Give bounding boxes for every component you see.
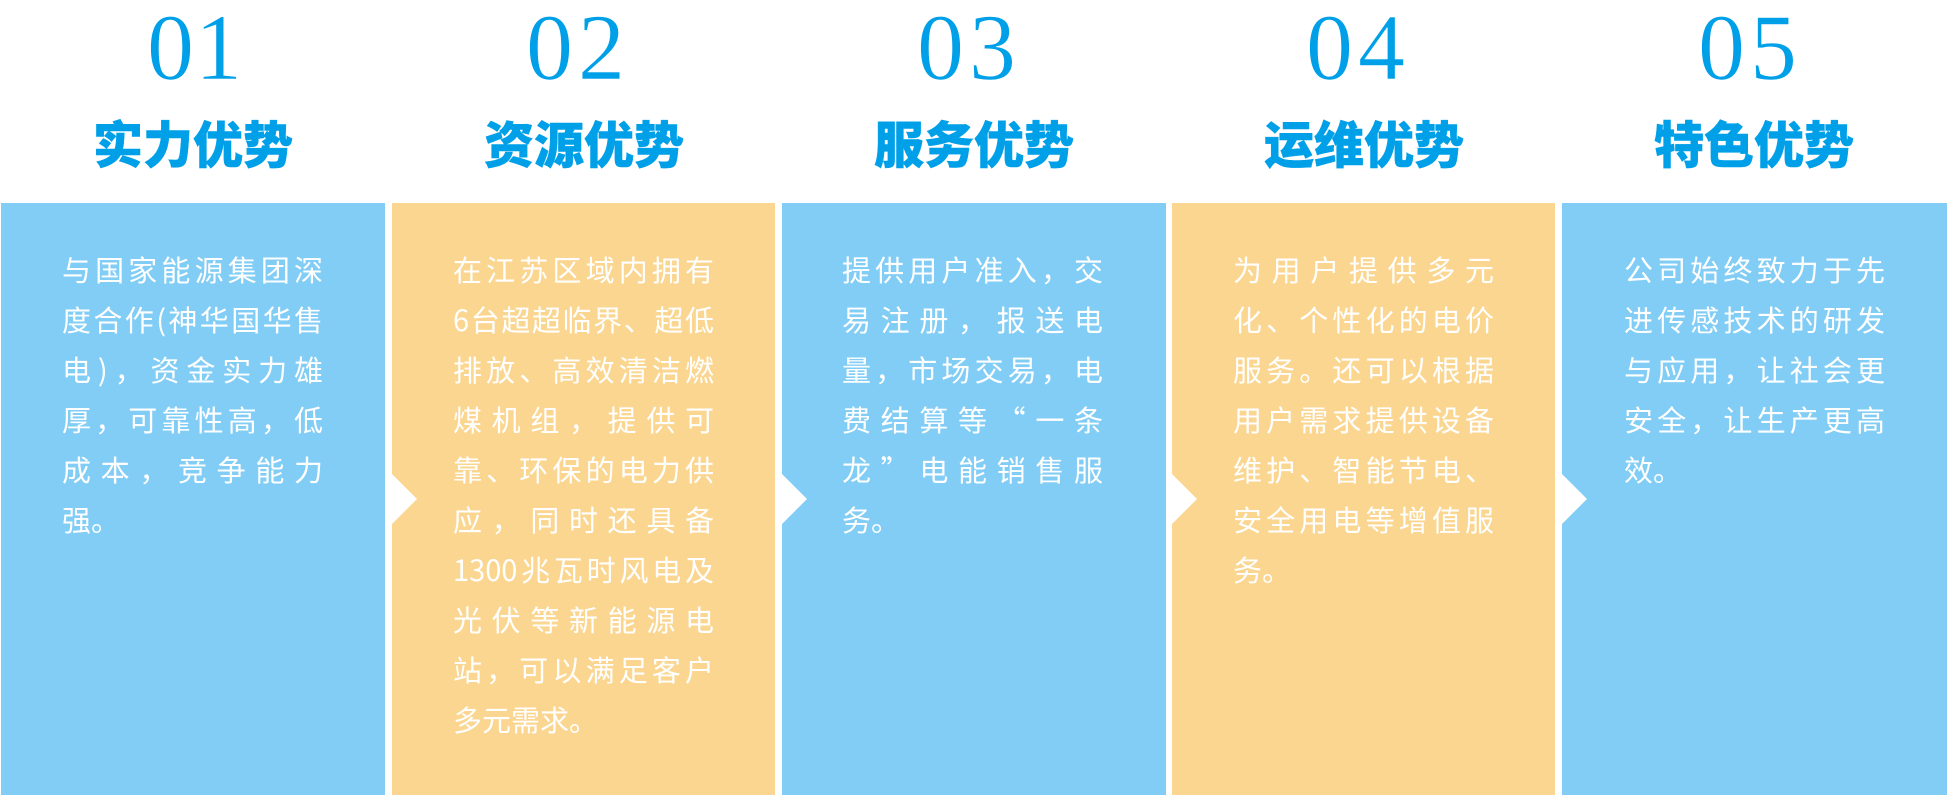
- text: 运维优势 description: 用户需求提供设备: [1233, 398, 1494, 440]
- text: 资源优势 description: 光伏等新能源电: [453, 598, 714, 640]
- text: 资源优势 description: 应，同时还具备: [453, 498, 714, 540]
- arrow 2: [782, 474, 807, 524]
- text: 服务优势 description: [842, 248, 1103, 540]
- arrow 3: [1172, 474, 1197, 524]
- text: 资源优势 description: 6台超超临界、超低: [453, 298, 714, 340]
- text: 运维优势 description: 务。: [1233, 548, 1291, 590]
- text: 特色优势 description: 与应用，让社会更: [1624, 348, 1885, 390]
- text: 实力优势 description: 电)，资金实力雄: [62, 348, 323, 390]
- text: 资源优势 description: 排放、高效清洁燃: [453, 348, 714, 390]
- text: 资源优势 description: 站，可以满足客户: [453, 648, 714, 690]
- text: 运维优势 description: 服务。还可以根据: [1233, 348, 1494, 390]
- panel: 资源优势: [392, 203, 775, 795]
- text: 资源优势 description: 1300兆瓦时风电及: [453, 548, 714, 590]
- text: 资源优势 description: 煤机组，提供可: [453, 398, 714, 440]
- text: 资源优势 description: 靠、环保的电力供: [453, 448, 714, 490]
- text: 服务优势 description: 易注册，报送电: [842, 298, 1103, 340]
- text: 服务优势 description: 务。: [842, 498, 900, 540]
- text: 运维优势 description: 安全用电等增值服: [1233, 498, 1494, 540]
- text: 特色优势 description: 公司始终致力于先: [1624, 248, 1885, 290]
- heading: 实力优势: 实力优势: [93, 118, 293, 174]
- panel: 实力优势: [1, 203, 385, 795]
- text: 运维优势 description: 为用户提供多元: [1233, 248, 1494, 290]
- panel: 特色优势: [1562, 203, 1947, 795]
- text: 运维优势 description: 维护、智能节电、: [1233, 448, 1494, 490]
- text: 实力优势 description: [62, 248, 323, 540]
- panel: 服务优势: [782, 203, 1166, 795]
- text: 实力优势 description: 厚，可靠性高，低: [62, 398, 323, 440]
- text: 运维优势 description: 化、个性化的电价: [1233, 298, 1494, 340]
- text: 资源优势 description: 在江苏区域内拥有: [453, 248, 714, 290]
- text: 服务优势 description: 费结算等“一条: [842, 398, 1103, 440]
- text: 服务优势 description: 龙”电能销售服: [842, 448, 1103, 490]
- text: 资源优势 description: 多元需求。: [453, 698, 598, 740]
- panel: 运维优势: [1172, 203, 1555, 795]
- text: 实力优势 description: 度合作(神华国华售: [62, 298, 323, 340]
- text: 特色优势 description: 进传感技术的研发: [1624, 298, 1885, 340]
- heading: 资源优势: 资源优势: [484, 118, 684, 174]
- text: 服务优势 description: 提供用户准入，交: [842, 248, 1103, 290]
- heading: 特色优势: 特色优势: [1654, 118, 1854, 174]
- text: 特色优势 description: 效。: [1624, 448, 1682, 490]
- text: 特色优势 description: [1624, 248, 1885, 490]
- text: 实力优势 description: 与国家能源集团深: [62, 248, 323, 290]
- text: 资源优势 description: [453, 248, 714, 740]
- heading: 服务优势: 服务优势: [874, 118, 1074, 174]
- arrow 1: [392, 474, 417, 524]
- text: 特色优势 description: 安全，让生产更高: [1624, 398, 1885, 440]
- text: 运维优势 description: [1233, 248, 1494, 590]
- arrow 4: [1562, 474, 1587, 524]
- text: 服务优势 description: 量，市场交易，电: [842, 348, 1103, 390]
- text: 实力优势 description: 强。: [62, 498, 120, 540]
- text: 实力优势 description: 成本，竞争能力: [62, 448, 323, 490]
- heading: 运维优势: 运维优势: [1264, 118, 1464, 174]
